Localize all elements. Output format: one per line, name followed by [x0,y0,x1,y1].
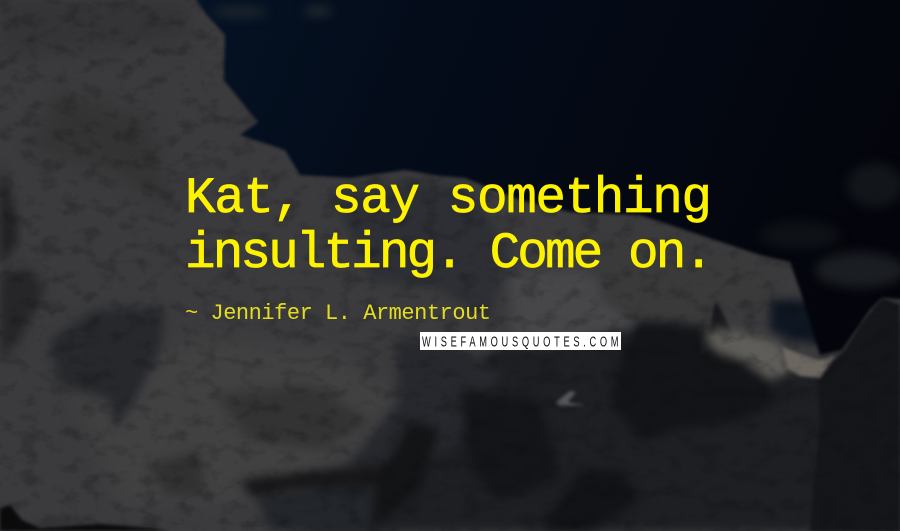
dark lower-right mountains [371,322,842,531]
pale peak face [512,273,628,332]
pale summit snow [704,328,790,380]
left crag streaks [0,165,18,262]
quote line 2: insulting. Come on. [185,226,714,283]
central dark crags [610,320,780,440]
mid rock bands [52,110,147,175]
bottom-left black ridge [0,505,170,531]
pale cloud glow [782,347,835,378]
soft cloud band [601,286,627,312]
dark pool at foot [256,488,364,531]
author attribution: ~ Jennifer L. Armentrout [185,301,491,326]
ridge tree point [710,303,731,334]
background: thin cloud wisps [212,6,900,288]
right dark peak [810,298,900,531]
dark blue patch [50,308,165,430]
small snow flash [555,391,585,406]
watermark badge: WISEFAMOUSQUOTES.COM [422,333,619,350]
black rock clusters [240,462,400,496]
dim left-side shoulder [14,14,176,44]
dusky blue slope [351,338,492,466]
bright central face [70,340,400,505]
quote line 1: Kat, say something [185,171,712,228]
quote text [185,171,714,283]
blue-grey shade on centre peaks [330,180,510,320]
dark sky wedge in the cloud [766,296,817,348]
